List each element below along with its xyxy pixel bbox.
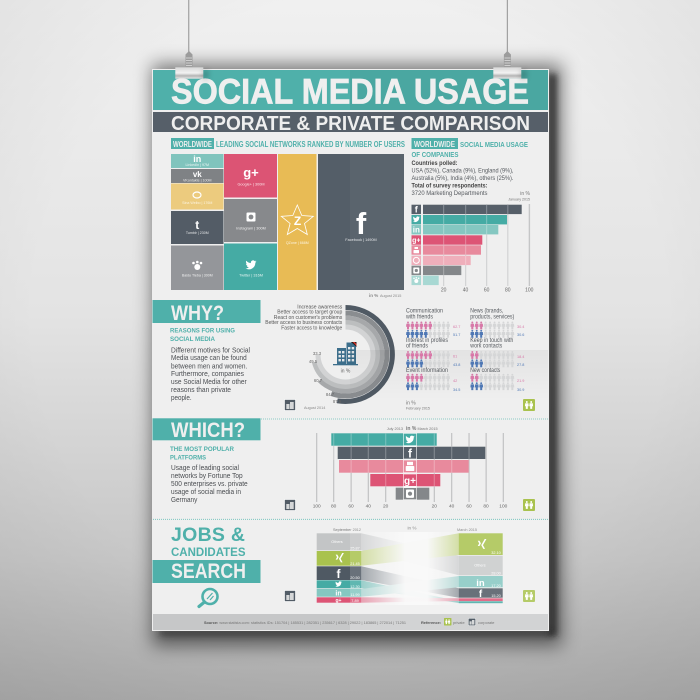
people values: 18.4 <box>517 355 524 359</box>
butterfly axis labels: 80 <box>483 504 489 510</box>
radial labels: Better access to target group <box>277 310 342 316</box>
radial date: August 2014 <box>304 406 325 410</box>
bar chart axis labels: 40 <box>463 288 468 294</box>
radial values: 49.5 <box>309 359 318 364</box>
alluvial right column: 17.20 <box>491 584 501 588</box>
section band: search: SEARCH <box>171 560 246 583</box>
text: why body: people. <box>171 393 192 402</box>
alluvial left column: g+ <box>336 598 342 604</box>
survey info text: Australia (5%), India (4%), others (25%). <box>412 176 514 182</box>
heading: jobs and candidates: JOBS & <box>171 524 245 546</box>
people caption: February 2015 <box>406 407 430 411</box>
tile: Twitter <box>224 244 277 290</box>
butterfly header: in % <box>406 426 417 432</box>
section band: which: WHICH? <box>171 419 245 442</box>
people values: 30.6 <box>517 333 524 337</box>
text: which body: usage of social media in <box>171 489 241 496</box>
people values: 34.5 <box>453 388 460 392</box>
alluvial left column: f <box>336 567 342 581</box>
radial bar chart: corporate reasons <box>265 304 392 404</box>
alluvial left column: 11.99 <box>350 593 360 597</box>
alluvial right column: Others <box>474 564 486 568</box>
treemap caption: August 2015 <box>380 294 401 298</box>
text: which body: Germany <box>171 497 198 504</box>
text: why body: between men and women. <box>171 361 247 370</box>
people titles: News (brands, <box>470 309 504 315</box>
alluvial right column <box>459 533 503 603</box>
people values: 61 <box>453 354 457 358</box>
survey info text: Countries polled: <box>412 161 458 167</box>
bar chart icons <box>412 205 421 285</box>
tile: QZone: QZone | 668M <box>286 241 309 245</box>
alluvial right column: f <box>479 589 483 600</box>
tile: Google+: g+ <box>243 165 259 180</box>
alluvial right column: 32.10 <box>491 551 501 555</box>
treemap caption <box>369 293 401 298</box>
bar chart axis labels <box>441 288 534 294</box>
footer <box>153 614 548 630</box>
people titles: Interest in profiles <box>406 338 448 344</box>
people values: 62.7 <box>453 325 460 329</box>
heading: jobs and candidates: CANDIDATES <box>171 545 246 559</box>
alluvial captions <box>333 526 477 532</box>
people values: 21.9 <box>517 379 524 383</box>
tile: Tumblr: t <box>195 218 199 232</box>
tile: Baidu Tieba <box>171 246 224 290</box>
heading: usage of companies: WORLDWIDE <box>414 140 456 149</box>
people titles: Communication <box>406 309 443 315</box>
bar chart caption: in % <box>520 191 531 197</box>
tile: QZone <box>278 154 316 290</box>
alluvial right column: 15.20 <box>491 594 501 598</box>
butterfly axis labels: 100 <box>499 504 508 510</box>
alluvial left column: 12.30 <box>350 585 360 589</box>
people values: 30.4 <box>517 325 524 329</box>
radial labels: React on customer's problems <box>274 315 343 321</box>
text: why body: Different motives for Social <box>171 345 250 354</box>
radial labels: Faster access to knowledge <box>281 326 342 332</box>
heading: leading social networks: LEADING SOCIAL NETWORKS RANKED BY NUMBER OF USERS <box>216 140 406 149</box>
legend <box>421 618 494 626</box>
alluvial right column: 28.00 <box>491 572 501 576</box>
butterfly header <box>387 426 438 432</box>
butterfly icons: f <box>408 446 413 460</box>
section band: why: WHY? <box>171 301 224 325</box>
tile: Facebook: f <box>356 206 367 241</box>
butterfly axis labels: 100 <box>313 504 321 510</box>
icon: magnifier <box>199 589 218 606</box>
people titles: of friends <box>406 344 428 350</box>
bar chart axis labels: 20 <box>441 288 447 294</box>
alluvial captions: March 2015 <box>457 528 477 532</box>
people values: 27.8 <box>517 363 524 367</box>
alluvial right column: in <box>476 578 485 589</box>
icon: private <box>523 590 535 602</box>
people values <box>453 325 524 392</box>
butterfly axis labels: 80 <box>331 504 337 510</box>
icon: corporate <box>284 499 296 511</box>
butterfly axis labels: 40 <box>366 504 371 510</box>
alluvial left column: 20.50 <box>350 576 360 580</box>
radial labels <box>265 304 343 332</box>
radial values: 33.3 <box>313 351 322 356</box>
icon: corporate <box>284 590 296 602</box>
bar chart caption <box>508 191 531 202</box>
people titles: work contacts <box>469 344 502 350</box>
people values: 43.8 <box>453 363 460 367</box>
butterfly chart: platforms <box>313 426 508 510</box>
people rows: right column <box>470 322 514 390</box>
tile: Google+ <box>224 154 277 198</box>
people titles <box>405 309 514 374</box>
people rows: left column <box>406 322 450 390</box>
alluvial captions: in % <box>408 526 416 530</box>
radial values: 84.7 <box>326 392 335 397</box>
butterfly icons <box>404 433 416 500</box>
tile: Sina Weibo <box>171 184 224 210</box>
butterfly axis labels: 40 <box>449 504 455 510</box>
icon: corporate building <box>333 342 358 365</box>
icon: private <box>523 499 535 511</box>
text: why body: reasons than private <box>171 385 231 394</box>
alluvial left column: Others <box>331 540 343 544</box>
people titles: Keep in touch with <box>470 338 513 344</box>
radial labels: Increase awareness <box>297 304 343 310</box>
text: which body: networks by Fortune Top <box>171 473 243 480</box>
panel shading <box>350 350 548 400</box>
radial labels: Better access to business contacts <box>265 320 343 326</box>
legend: private <box>453 620 465 625</box>
clip: left hanger <box>175 0 208 79</box>
tile: LinkedIn: LinkedIn | 97M <box>186 163 209 167</box>
people titles: New contacts <box>470 368 500 374</box>
treemap caption: in % <box>369 293 378 298</box>
icon: private <box>523 399 535 411</box>
text: why body: Media usage can be found <box>171 353 247 362</box>
alluvial flows <box>361 533 459 603</box>
heading: most popular: PLATFORMS <box>170 455 206 462</box>
subtitle: CORPORATE & PRIVATE COMPARISON <box>171 112 530 135</box>
tile: VKontakte: VKontakte | 100M <box>183 178 212 182</box>
bar chart axis labels: 80 <box>505 288 511 294</box>
survey info text: USA (52%), Canada (9%), England (9%), <box>412 168 514 174</box>
radial unit: in % <box>341 368 351 374</box>
source text: Source: www.statista.com: statistics IDs: 151704 | 185531 | 282351 | 235617 | 6328 | 29022 | 183865 | 272014 | 71251 <box>204 620 406 625</box>
heading: leading social networks <box>171 138 406 149</box>
bar chart caption: January 2015 <box>508 198 530 202</box>
bar chart: company usage <box>412 191 534 294</box>
survey info text: Total of survey respondents: <box>412 184 488 190</box>
title banner <box>153 70 548 112</box>
tile: Google+: Google+ | 300M <box>237 182 265 186</box>
heading: usage of companies: SOCIAL MEDIA USAGE <box>460 140 528 149</box>
tile: VKontakte <box>171 169 224 183</box>
butterfly axis labels: 60 <box>348 504 354 510</box>
alluvial left column: in <box>335 590 342 598</box>
alluvial captions: September 2012 <box>333 528 361 532</box>
radial values: 87.9 <box>333 399 342 404</box>
section band: why <box>152 300 260 325</box>
butterfly axis labels: 60 <box>466 504 472 510</box>
heading: most popular <box>170 446 234 462</box>
alluvial left column: 21.45 <box>350 562 360 566</box>
legend: Reference: <box>421 620 441 625</box>
clip: right hanger <box>493 0 526 79</box>
people titles: products, services) <box>470 314 514 320</box>
tile: Instagram <box>224 199 277 242</box>
bar chart axis labels: 100 <box>525 288 534 294</box>
tile: Tumblr <box>171 211 224 244</box>
people values: 51.7 <box>453 333 460 337</box>
butterfly header: July 2013 <box>387 427 403 431</box>
people values: 42 <box>453 379 457 383</box>
alluvial left column <box>317 533 361 604</box>
tile: Instagram: Instagram | 300M <box>236 226 266 230</box>
text: why body: use Social Media for other <box>171 377 247 386</box>
poster sheet <box>152 69 549 631</box>
subtitle banner <box>153 112 548 135</box>
butterfly axis labels <box>313 504 508 510</box>
bar chart axis labels: 60 <box>484 288 490 294</box>
heading: reasons <box>170 328 235 343</box>
butterfly header: March 2015 <box>418 427 438 431</box>
bar chart icons: f <box>415 205 419 215</box>
bar chart icons: in <box>413 226 420 235</box>
heading: leading social networks: WORLDWIDE <box>173 140 213 149</box>
treemap: social networks by users <box>171 154 404 290</box>
heading: most popular: THE MOST POPULAR <box>170 446 234 453</box>
tile: Sina Weibo: Sina Weibo | 176M <box>182 201 212 205</box>
people values: 30.9 <box>517 388 524 392</box>
butterfly axis labels: 20 <box>383 504 389 510</box>
text: which body <box>171 465 248 504</box>
alluvial chart: jobs platforms <box>317 526 503 605</box>
tile: Tumblr: Tumblr | 230M <box>186 231 209 235</box>
heading: jobs and candidates <box>171 524 246 559</box>
people caption: in % <box>406 400 416 406</box>
tile: VKontakte: vk <box>193 170 202 179</box>
butterfly axis labels: 20 <box>432 504 437 510</box>
survey info text <box>412 161 514 197</box>
icon: corporate <box>284 399 296 411</box>
people caption <box>406 400 430 411</box>
text: which body: Usage of leading social <box>171 465 239 472</box>
tile: Facebook <box>318 154 404 290</box>
poster shadow <box>152 64 562 646</box>
heading: reasons: SOCIAL MEDIA <box>170 336 215 343</box>
alluvial left column: 25.87 <box>350 546 360 550</box>
tile: Twitter: Twitter | 316M <box>239 274 263 278</box>
title: SOCIAL MEDIA USAGE <box>171 72 529 112</box>
tile: Baidu Tieba: Baidu Tieba | 300M <box>182 274 213 278</box>
butterfly icons: g+ <box>404 476 416 487</box>
people titles: with friends <box>405 314 433 320</box>
people titles: Event information <box>406 368 448 374</box>
tile: Facebook: Facebook | 1490M <box>345 238 377 242</box>
bar chart icons: g+ <box>412 238 420 245</box>
text: which body: 500 enterprises vs. private <box>171 481 248 488</box>
heading: reasons: REASONS FOR USING <box>170 328 235 335</box>
radial values <box>309 351 342 404</box>
alluvial left column: 7.89 <box>351 599 359 603</box>
heading: usage of companies <box>412 138 528 159</box>
poster fold shading <box>350 520 548 614</box>
panel: private reasons <box>405 309 535 411</box>
legend: corporate <box>478 620 494 625</box>
text: why body <box>171 345 250 402</box>
survey info text: 3720 Marketing Departments <box>412 191 488 197</box>
tile: QZone: Z <box>294 214 301 228</box>
tile: LinkedIn: in <box>193 154 201 164</box>
tile: LinkedIn <box>171 154 224 168</box>
text: why body: Furthermore, companies <box>171 369 244 378</box>
radial values: 60.7 <box>314 378 323 383</box>
heading: usage of companies: OF COMPANIES <box>412 150 458 159</box>
